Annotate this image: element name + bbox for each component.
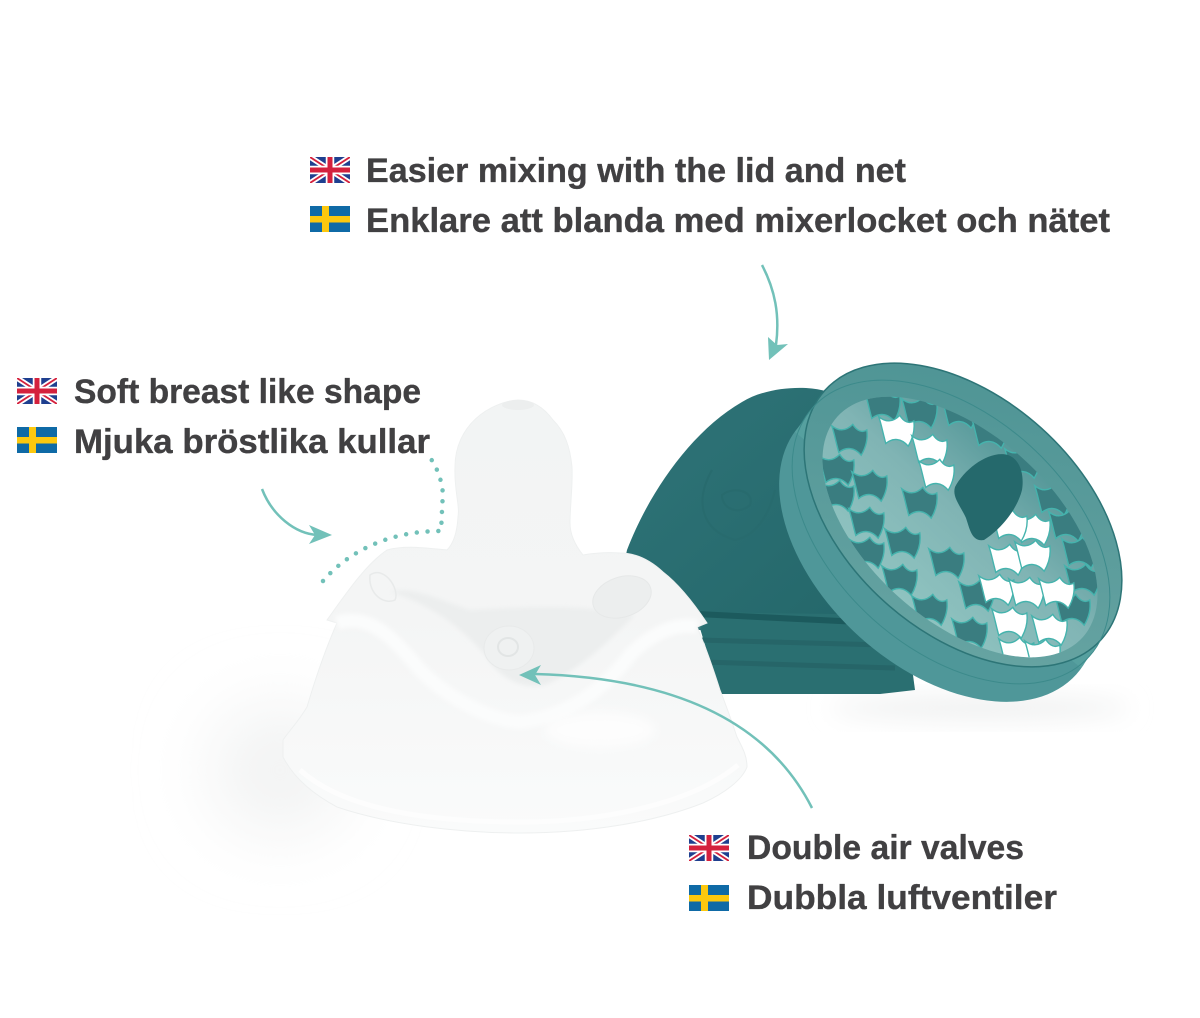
green dome lid [625, 388, 915, 694]
soft shadow left of nipple [210, 705, 350, 835]
flag: Sweden [689, 885, 729, 911]
dotted outline of shape [323, 459, 443, 581]
english label: Easier mixing with the lid and net [366, 152, 906, 190]
flag: Sweden [310, 206, 350, 232]
arrow: to air valves [519, 665, 812, 808]
english label: Soft breast like shape [74, 373, 421, 411]
arrow: to mixer lid [762, 265, 788, 360]
swedish label: Mjuka bröstlika kullar [74, 423, 430, 461]
swedish label: Enklare att blanda med mixerlocket och nätet [366, 202, 1110, 240]
flag: UK [17, 378, 57, 404]
english label: Double air valves [747, 829, 1024, 867]
heading: breast shape [17, 373, 430, 461]
flag: UK [689, 835, 729, 861]
net disc with rim [779, 362, 1123, 702]
product: mixer lid and net [625, 304, 1180, 761]
ribbon [337, 621, 697, 722]
heading: air valves [689, 829, 1057, 917]
flag: Sweden [17, 427, 57, 453]
base band [300, 765, 738, 822]
swedish label: Dubbla luftventiler [747, 879, 1057, 917]
inner valley [390, 590, 635, 686]
tip [502, 400, 534, 410]
arrow: to breast shape [262, 489, 332, 544]
flap left [370, 573, 396, 601]
centre knob [954, 454, 1023, 540]
product: silicone nipple [283, 400, 747, 833]
centre valve [484, 626, 534, 670]
highlight [545, 712, 655, 748]
air valve [587, 569, 657, 625]
flag: UK [310, 157, 350, 183]
lid shadow [830, 696, 1130, 720]
net holes [819, 390, 1100, 670]
heading: mixing lid [310, 152, 1110, 240]
